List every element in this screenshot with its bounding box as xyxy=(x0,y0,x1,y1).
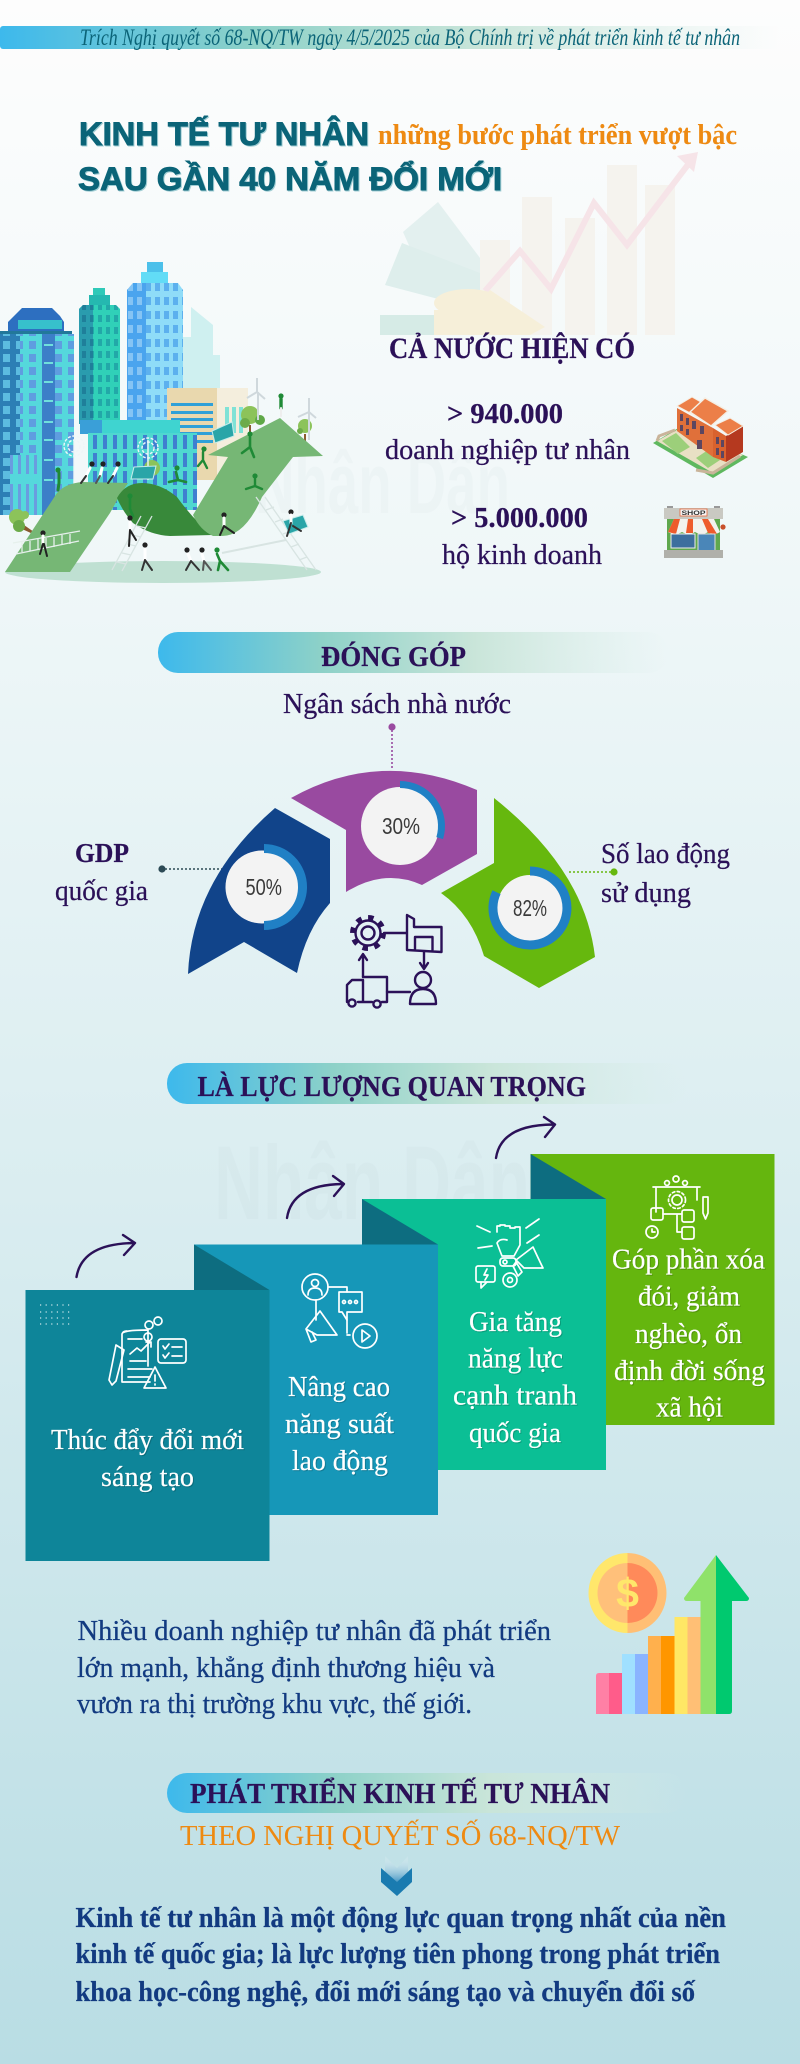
icon: organisation chart xyxy=(646,1176,708,1239)
arrow 1 xyxy=(76,1235,135,1277)
card text xyxy=(612,1245,766,1424)
tiny workers xyxy=(40,394,301,570)
conclusion text: kinh tế quốc gia; là lực lượng tiên phong trong phát triển xyxy=(76,1939,720,1970)
card text: năng lực xyxy=(468,1344,563,1375)
section pill: develop private economy: PHÁT TRIỂN KINH TẾ TƯ NHÂN xyxy=(190,1776,610,1810)
card text: định đời sống xyxy=(614,1356,765,1387)
card text: Thúc đẩy đổi mới xyxy=(51,1425,244,1456)
conclusion text: khoa học-công nghệ, đổi mới sáng tạo và chuyển đổi số xyxy=(76,1977,696,2008)
icon: shop: SHOP xyxy=(682,510,706,517)
wind turbines xyxy=(64,378,316,484)
stat: enterprises: doanh nghiệp tư nhân xyxy=(385,435,630,466)
icon: office building xyxy=(653,397,748,478)
ladders and rope xyxy=(13,497,316,571)
watermark lower: Nhân Dân xyxy=(214,1125,530,1242)
card text: Góp phần xóa xyxy=(612,1245,766,1276)
section pill: contribution xyxy=(158,632,668,673)
stat: households: > 5.000.000 xyxy=(451,502,588,534)
background decoration: growth chart and money xyxy=(380,152,698,335)
section pill: contribution: ĐÓNG GÓP xyxy=(321,640,466,673)
arrow 3 xyxy=(496,1117,555,1158)
illustration: city and green growth arrow xyxy=(0,262,323,583)
card text: xã hội xyxy=(656,1392,723,1424)
card text: năng suất xyxy=(285,1409,394,1440)
icon: media and megaphone xyxy=(302,1274,377,1348)
stat: households: hộ kinh doanh xyxy=(442,540,602,571)
label: labor: Số lao động xyxy=(601,839,730,870)
card text xyxy=(51,1425,244,1493)
conclusion text xyxy=(76,1903,726,2008)
connector: labor xyxy=(569,868,618,876)
tall blue tower xyxy=(127,262,183,424)
icon: document with checklist xyxy=(109,1317,186,1388)
paragraph: enterprises growing: vươn ra thị trường khu vực, thế giới. xyxy=(77,1689,472,1720)
solar panels xyxy=(131,422,234,479)
coin: $ xyxy=(616,1570,639,1616)
segment: labor 82%: 82% xyxy=(513,895,547,921)
ribbon: left rise xyxy=(5,482,128,572)
watermark: Nhân Dân xyxy=(255,436,510,532)
icon: production flow xyxy=(347,915,442,1008)
segment: labor 82% xyxy=(441,798,595,988)
label: GDP: quốc gia xyxy=(55,876,149,907)
title: những bước phát triển vượt bậc xyxy=(378,119,737,151)
beige building xyxy=(167,388,248,480)
title xyxy=(78,116,737,197)
card 4: poverty reduction xyxy=(531,1154,774,1425)
card 3: competitiveness xyxy=(362,1199,606,1470)
icon: fist and megaphone xyxy=(476,1219,543,1288)
green arrow xyxy=(684,1555,749,1714)
card text xyxy=(285,1372,394,1477)
label: GDP xyxy=(55,838,149,907)
coin xyxy=(589,1553,667,1633)
icon: double chevron xyxy=(381,1856,412,1896)
pale background building xyxy=(183,307,220,420)
trees xyxy=(9,406,312,534)
card text: cạnh tranh xyxy=(453,1380,577,1412)
stat: enterprises: > 940.000 xyxy=(447,398,563,430)
icon: shop xyxy=(664,506,726,558)
dot pattern xyxy=(40,1305,73,1324)
connector: state budget xyxy=(388,723,396,769)
segment: GDP 50% xyxy=(188,808,330,974)
card text: đói, giảm xyxy=(638,1282,740,1312)
stat: enterprises xyxy=(385,398,630,466)
section pill: important force: LÀ LỰC LƯỢNG QUAN TRỌNG xyxy=(198,1070,586,1103)
paragraph: enterprises growing: Nhiều doanh nghiệp tư nhân đã phát triển xyxy=(78,1616,551,1647)
subheading: resolution: THEO NGHỊ QUYẾT SỐ 68-NQ/TW xyxy=(180,1818,621,1852)
conclusion text: Kinh tế tư nhân là một động lực quan trọng nhất của nền xyxy=(76,1903,726,1934)
bars xyxy=(596,1617,700,1714)
card text: lao động xyxy=(292,1446,388,1477)
left domed building xyxy=(0,308,74,515)
card 1: innovation xyxy=(26,1290,270,1561)
connector: GDP xyxy=(158,865,224,873)
card text: quốc gia xyxy=(469,1418,562,1449)
segment: budget 30% xyxy=(291,771,477,892)
label: labor xyxy=(601,839,730,909)
segment: budget 30%: 30% xyxy=(382,813,420,839)
stat: households xyxy=(442,502,602,571)
paragraph: enterprises growing: lớn mạnh, khẳng định thương hiệu và xyxy=(77,1653,496,1684)
stats heading: CẢ NƯỚC HIỆN CÓ xyxy=(389,332,635,365)
card text: Nâng cao xyxy=(288,1372,390,1403)
label: labor: sử dụng xyxy=(601,878,691,909)
card text: Gia tăng xyxy=(469,1307,562,1338)
label: GDP: GDP xyxy=(75,838,129,868)
segment: GDP 50%: 50% xyxy=(246,874,282,900)
icon: rising bars with coin xyxy=(589,1553,749,1714)
low teal building xyxy=(80,420,197,510)
shadow xyxy=(5,561,321,583)
label: state budget: Ngân sách nhà nước xyxy=(283,689,511,720)
section pill: develop private economy xyxy=(167,1773,687,1813)
section pill: important force xyxy=(167,1063,687,1104)
card text xyxy=(453,1307,577,1449)
card text: sáng tạo xyxy=(101,1462,194,1493)
title: KINH TẾ TƯ NHÂN xyxy=(79,116,369,152)
arrow 2 xyxy=(287,1176,344,1218)
ribbon: dark valley xyxy=(117,483,213,536)
card 2: productivity xyxy=(194,1244,438,1515)
paragraph: enterprises growing xyxy=(77,1616,551,1720)
card text: nghèo, ổn xyxy=(635,1319,742,1350)
teal tower xyxy=(79,288,120,424)
solar panel held xyxy=(283,515,308,534)
ribbon: rising arrow xyxy=(193,418,323,536)
title: SAU GẦN 40 NĂM ĐỔI MỚI xyxy=(78,161,502,197)
